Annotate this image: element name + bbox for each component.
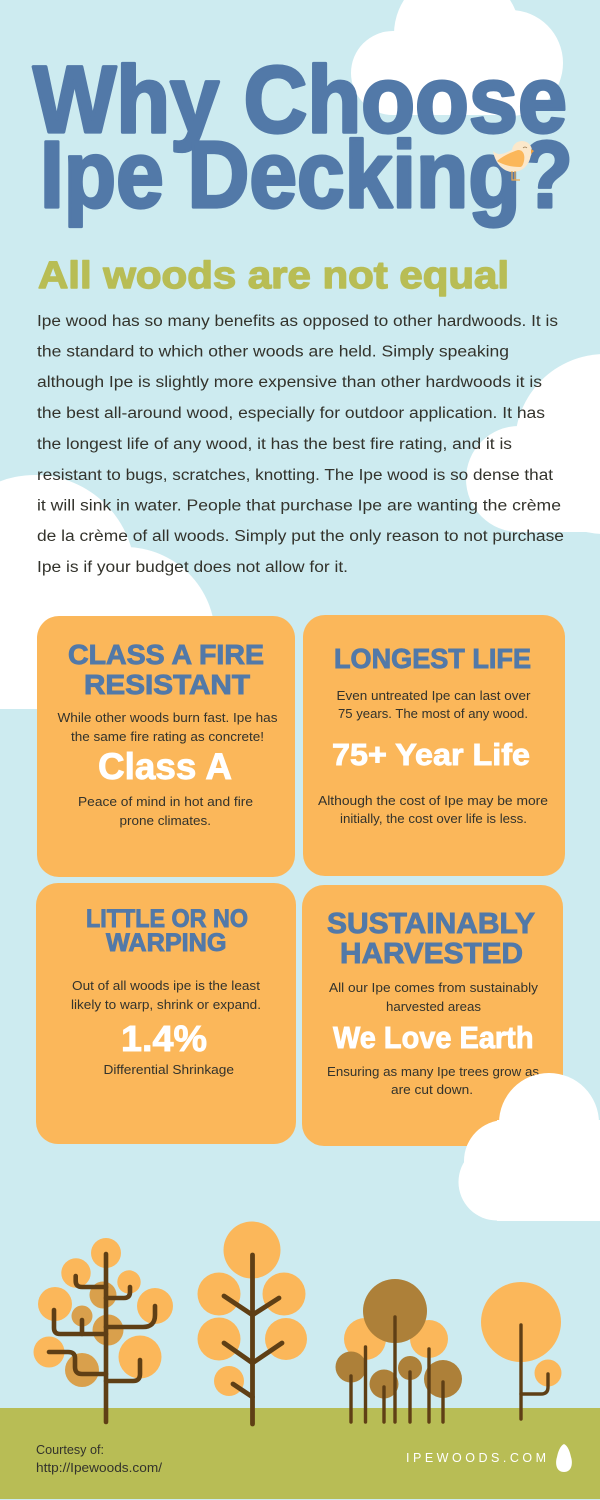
stat: Class A: Class A <box>98 746 232 787</box>
icon: tree cluster <box>336 1279 462 1422</box>
panel text: While other woods burn fast. Ipe has <box>58 711 278 725</box>
panel text: Even untreated Ipe can last over <box>336 689 530 703</box>
stat: we love earth: We Love Earth <box>333 1020 534 1055</box>
icon: tree 1 <box>34 1238 173 1422</box>
icon: bird <box>493 141 534 180</box>
intro text block <box>37 313 564 576</box>
panel note: Differential Shrinkage <box>104 1063 234 1077</box>
cloud: middle right <box>466 354 600 534</box>
panel note: prone climates. <box>120 814 211 828</box>
panel: class A fire resistant <box>37 616 295 877</box>
intro text block: de la crème of all woods. Simply put the only reason to not purchase <box>37 528 564 545</box>
panel note <box>327 1065 539 1097</box>
panel text: 75 years. The most of any wood. <box>338 707 528 721</box>
credit text <box>36 1443 163 1475</box>
panel heading: LONGEST LIFE <box>334 643 531 674</box>
intro text block: resistant to bugs, scratches, knotting. The Ipe wood is so dense that <box>37 467 554 484</box>
panel text: likely to warp, shrink or expand. <box>71 998 261 1012</box>
panel note: Ensuring as many Ipe trees grow as <box>327 1065 539 1079</box>
ground <box>0 1408 600 1499</box>
intro text block: the best all-around wood, especially for outdoor application. It has <box>37 405 545 422</box>
panel heading: CLASS A FIRE <box>68 639 264 670</box>
panel: little or no warping <box>36 883 296 1144</box>
panel heading: HARVESTED <box>340 938 523 970</box>
panel heading: WARPING <box>106 929 226 957</box>
intro text block: it will sink in water. People that purchase Ipe are wanting the crème <box>37 498 561 514</box>
panel note <box>78 795 253 828</box>
panel text: Out of all woods ipe is the least <box>72 979 261 993</box>
intro text block: the standard to which other woods are held. Simply speaking <box>37 344 509 360</box>
subheading: All woods are not equal <box>38 255 509 297</box>
panel text: the same fire rating as concrete! <box>71 730 264 744</box>
panel text <box>71 979 261 1012</box>
panel heading: SUSTAINABLY <box>327 908 535 940</box>
panel heading <box>327 908 535 970</box>
intro text block: although Ipe is slightly more expensive than other hardwoods it is <box>37 374 542 391</box>
icon: tree 4 <box>481 1282 562 1419</box>
panel text: harvested areas <box>386 1000 481 1014</box>
title <box>33 47 573 228</box>
cloud: lower right <box>458 1073 600 1221</box>
panel heading: RESISTANT <box>84 669 250 700</box>
panel text <box>329 981 539 1014</box>
panel note: Although the cost of Ipe may be more <box>318 794 548 808</box>
panel note: initially, the cost over life is less. <box>340 812 527 826</box>
icon: seed logo <box>556 1444 572 1472</box>
intro text block: the longest life of any wood, it has the best fire rating, and it is <box>37 436 512 453</box>
stat: 1.4%: 1.4% <box>121 1018 207 1059</box>
panel heading <box>86 905 248 957</box>
panel text: All our Ipe comes from sustainably <box>329 981 539 995</box>
icon: tree 2 <box>198 1222 307 1424</box>
intro text block: Ipe is if your budget does not allow for it. <box>37 559 348 576</box>
panel heading: LITTLE OR NO <box>86 905 248 933</box>
credit text: http://Ipewoods.com/ <box>36 1461 163 1475</box>
cloud: middle left <box>0 475 215 727</box>
panel text <box>336 689 530 721</box>
stat: 75+ year life: 75+ Year Life <box>332 737 530 772</box>
intro text block: Ipe wood has so many benefits as opposed to other hardwoods. It is <box>37 313 558 330</box>
panel text <box>58 711 278 744</box>
panel note: Peace of mind in hot and fire <box>78 795 253 809</box>
cloud: top right <box>351 0 563 116</box>
panel heading <box>68 639 264 700</box>
panel note <box>318 794 548 826</box>
title: Why Choose <box>33 47 567 153</box>
website label: IPEWOODS.COM <box>406 1451 546 1465</box>
panel note: are cut down. <box>391 1083 473 1097</box>
credit text: Courtesy of: <box>36 1443 104 1457</box>
panel: sustainably harvested <box>302 885 563 1146</box>
panel: longest life <box>303 615 565 876</box>
